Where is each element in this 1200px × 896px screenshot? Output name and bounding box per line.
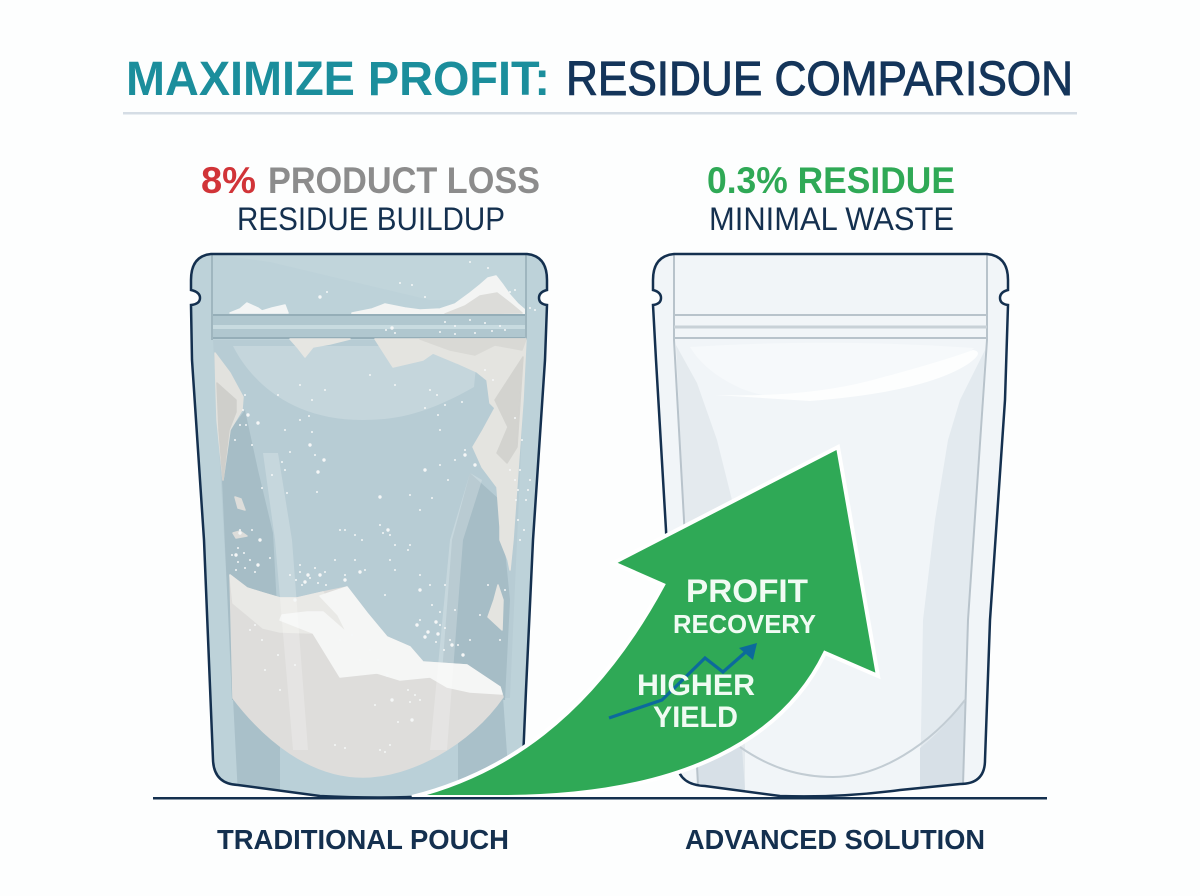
ground line <box>153 797 1047 800</box>
label: advanced solution: ADVANCED SOLUTION <box>685 824 985 855</box>
pouch outline <box>653 254 1008 796</box>
arrow label: RECOVERY <box>673 609 816 639</box>
residue: top mounds <box>230 276 526 315</box>
arrow label: YIELD <box>653 701 738 734</box>
title: MAXIMIZE PROFIT: <box>126 53 550 106</box>
residue: powder specks <box>232 262 535 752</box>
title <box>126 53 1073 106</box>
panel: traditional pouch with residue <box>180 250 560 800</box>
title: RESIDUE COMPARISON <box>566 53 1073 106</box>
heading: traditional pouch stat: 8% <box>201 160 256 201</box>
arrow: profit recovery <box>412 447 878 797</box>
heading: traditional pouch stat: RESIDUE BUILDUP <box>237 201 505 237</box>
heading: advanced solution stat <box>707 160 955 237</box>
label: traditional pouch: TRADITIONAL POUCH <box>217 824 509 855</box>
heading: traditional pouch stat <box>201 160 540 237</box>
heading: traditional pouch stat: PRODUCT LOSS <box>268 160 540 201</box>
chart line icon <box>609 643 757 718</box>
pouch outline <box>191 254 547 798</box>
arrow label: HIGHER <box>637 669 755 702</box>
arrow label: PROFIT <box>686 573 808 609</box>
panel: advanced pouch clean <box>640 250 1020 800</box>
residue: clinging powder upper <box>215 339 526 630</box>
heading: advanced solution stat: 0.3% RESIDUE <box>707 160 955 201</box>
residue: zipper band <box>212 254 527 340</box>
arrow label <box>637 573 816 734</box>
residue: settled powder lower <box>230 453 503 777</box>
heading: advanced solution stat: MINIMAL WASTE <box>709 201 954 237</box>
